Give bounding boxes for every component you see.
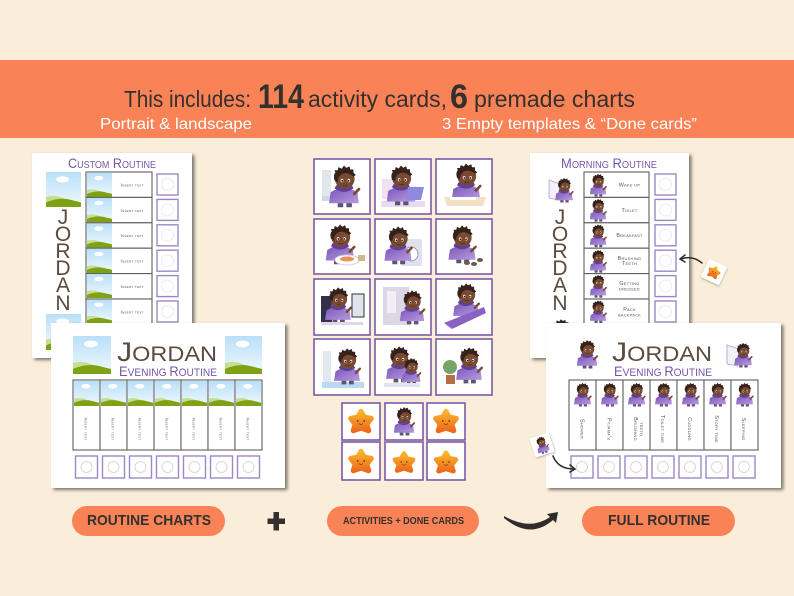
headline: premade charts [474, 86, 635, 112]
activity rows: Wake up [619, 182, 640, 188]
activity columns: Insert text [192, 417, 196, 441]
subtitle: evening routine: EVENING ROUTINE [614, 363, 712, 379]
activity columns [73, 380, 262, 450]
pill: routine charts [72, 506, 225, 536]
picture: landscape bottom [46, 314, 81, 350]
picture: child at easel [727, 343, 752, 368]
activity rows: Insert text [120, 182, 144, 188]
picture: right landscape [225, 336, 262, 374]
card: eating breakfast [314, 219, 370, 274]
done card: star 4 [385, 442, 423, 480]
name: JORDAN vertical: A [553, 274, 567, 297]
arrow: sticker to evening chart [553, 456, 575, 472]
activity columns: teeth [638, 422, 644, 436]
pill: full routine [582, 506, 735, 536]
done card: star 3 [342, 442, 380, 480]
panel: custom routine portrait chart [32, 153, 192, 358]
activity rows: backpack [618, 312, 641, 318]
card: parent and child [375, 339, 431, 395]
name: JORDAN vertical: O [552, 223, 568, 246]
activity rows: Getting [619, 281, 640, 287]
activity columns: Insert text [138, 417, 142, 441]
headline: 114 [258, 78, 304, 116]
subheading: portrait and landscape: Portrait & landscape [100, 116, 252, 133]
done card: star 1 [342, 403, 380, 440]
arrow: sticker to morning chart [680, 255, 702, 263]
pill: activities and done cards [327, 506, 479, 536]
heading: morning routine: Morning Routine [561, 155, 657, 171]
name: JORDAN vertical: N [552, 292, 568, 315]
activity rows: Insert text [120, 284, 144, 289]
headline: This includes: [124, 86, 251, 112]
activity rows: Pack [623, 307, 636, 313]
card: computer [314, 279, 370, 335]
name: JORDAN vertical: D [552, 257, 568, 280]
pill: routine charts: ROUTINE CHARTS [87, 512, 211, 529]
panel: done cards grid [342, 403, 465, 480]
activity columns: Shower [578, 419, 584, 439]
headline [124, 78, 635, 116]
picture: left landscape [73, 336, 111, 374]
panel: evening routine completed chart [546, 323, 781, 488]
card: writing at desk [436, 159, 492, 214]
activity columns: Pyjama's [606, 418, 612, 440]
name: JORDAN vertical: O [55, 223, 71, 246]
arrow: to full routine [504, 512, 558, 530]
header band [0, 60, 794, 138]
check boxes [571, 456, 755, 478]
picture: child thumbs up [577, 340, 597, 368]
activity rows: dressed [619, 286, 640, 292]
check boxes [157, 174, 178, 322]
pill: activities and done cards: ACTIVITIES + DONE CARDS [343, 516, 464, 527]
card: getting dressed [375, 279, 431, 335]
panel: evening routine landscape template [51, 323, 285, 488]
activity columns: Insert text [218, 417, 224, 441]
activity rows: Insert text [120, 258, 144, 264]
activity rows: Insert text [120, 233, 144, 238]
activity rows: Toilet [621, 208, 638, 214]
name: JORDAN vertical: D [55, 257, 71, 280]
picture: child at easel [549, 178, 573, 203]
subtitle: evening routine: EVENING ROUTINE [119, 363, 217, 379]
done card: child thumbs up [385, 403, 423, 440]
heading: custom routine: Custom Routine [68, 155, 156, 171]
activity columns: Cuddling [686, 417, 692, 441]
panel: activity cards grid [314, 159, 492, 395]
pill: full routine: FULL ROUTINE [608, 512, 710, 529]
done card: star 2 [427, 403, 465, 440]
headline: activity cards, [308, 86, 447, 112]
activity rows: Teeth [622, 261, 637, 267]
icon: star sticker [701, 259, 727, 285]
name: JORDAN vertical: R [55, 240, 71, 263]
check boxes [655, 174, 676, 322]
panel: morning routine portrait chart [530, 153, 689, 358]
card: laptop [375, 159, 431, 214]
activity rows: Insert text [120, 208, 144, 213]
activity columns: Insert text [84, 417, 88, 441]
activity columns [569, 380, 758, 450]
card: on the slide [436, 279, 492, 335]
name: JORDAN vertical [55, 206, 71, 315]
activity columns: Insert text [164, 417, 170, 441]
activity columns: Story time [713, 415, 719, 443]
activity rows: Brushing [618, 256, 641, 262]
activity rows: Insert text [120, 310, 144, 314]
card: washing machine [375, 219, 431, 274]
picture: child bottom [549, 319, 573, 351]
activity rows [86, 172, 152, 324]
title: Jordan: JORDAN [117, 337, 217, 367]
check boxes [76, 456, 260, 478]
name: JORDAN vertical [552, 206, 568, 315]
name: JORDAN vertical: A [56, 274, 70, 297]
activity rows [584, 172, 649, 324]
name: JORDAN vertical: N [55, 292, 71, 315]
activity columns: Insert text [110, 417, 116, 441]
picture: landscape top [46, 172, 81, 207]
headline: 6 [450, 78, 468, 116]
title: Jordan: JORDAN [612, 337, 712, 367]
card: watering plant [436, 339, 492, 395]
card: cleaning window [314, 339, 370, 395]
name: JORDAN vertical: J [58, 206, 68, 229]
icon: plus [268, 512, 285, 530]
subheading: templates: 3 Empty templates & “Done cards” [442, 116, 697, 133]
done card: star 5 [427, 442, 465, 480]
activity columns: Sleeping [740, 418, 746, 440]
activity columns: Insert text [246, 417, 250, 441]
icon: child sticker [529, 432, 555, 458]
name: JORDAN vertical: R [552, 240, 568, 263]
card: brushing teeth [314, 159, 370, 214]
name: JORDAN vertical: J [555, 206, 565, 229]
activity rows: Breakfast [616, 233, 643, 239]
activity columns: Toilet time [659, 415, 665, 443]
activity columns: Brushing [632, 417, 638, 441]
card: feeding ducks [436, 219, 492, 274]
